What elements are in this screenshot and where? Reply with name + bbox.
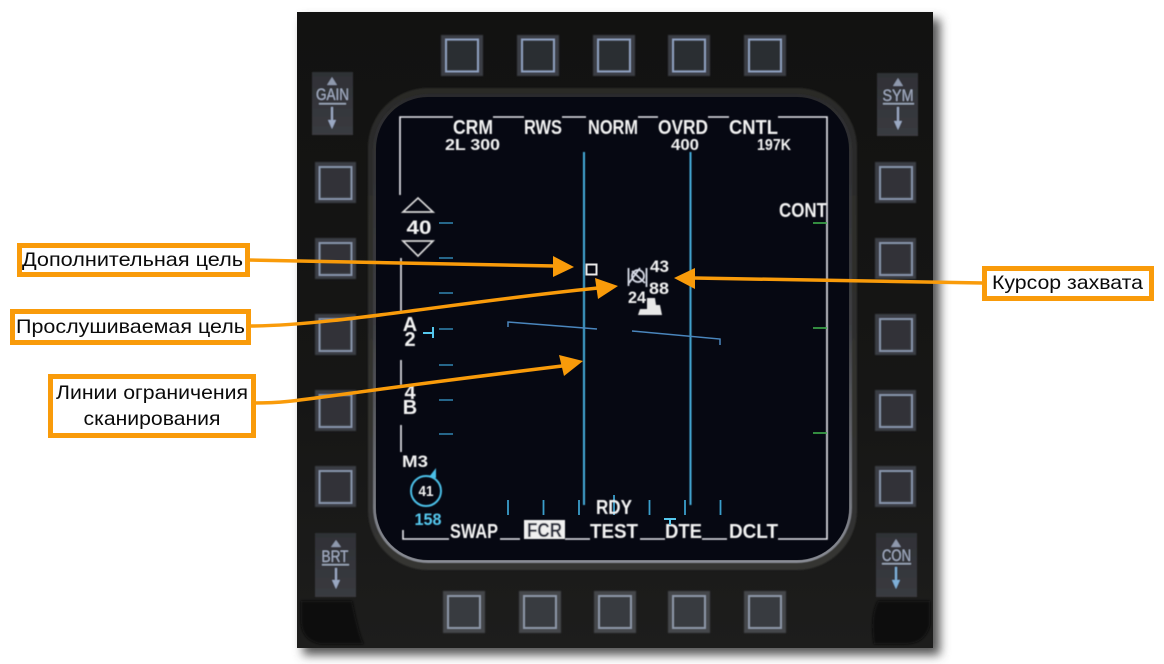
- rocker: SYM: SYM: [882, 86, 914, 105]
- target data: 88: [649, 279, 669, 298]
- left buttons: [318, 165, 353, 504]
- elevation ticks: [439, 223, 453, 434]
- bottom buttons: [446, 594, 783, 630]
- sub labels: [445, 137, 791, 154]
- top labels: [453, 117, 778, 139]
- CONT label: CONT: [779, 200, 827, 222]
- bottom labels: DTE: [665, 521, 702, 543]
- rocker: GAIN: [312, 72, 353, 135]
- range ticks: [813, 223, 827, 433]
- sub labels: 197K: [757, 137, 791, 154]
- bar scan and azimuth labels: A: [403, 314, 417, 336]
- screen bezel: [368, 88, 857, 570]
- sub labels: 400: [671, 137, 699, 154]
- bullseye: [411, 468, 442, 529]
- cyan scan cursors: [584, 152, 690, 505]
- range scale: 40: [406, 218, 432, 239]
- rocker: BRT: [315, 533, 356, 597]
- sub labels: 2L 300: [445, 137, 500, 154]
- acquisition cursor: [638, 298, 662, 315]
- radar altitude cue: [423, 327, 433, 338]
- callout: scan limit lines: сканирования: [84, 408, 220, 430]
- bar scan and azimuth labels: 2: [404, 329, 416, 351]
- bar scan and azimuth labels: 4: [404, 382, 416, 404]
- top buttons: [444, 38, 783, 73]
- azimuth ticks: [508, 495, 720, 515]
- target data: [628, 257, 669, 307]
- bottom labels: [450, 497, 778, 543]
- callout: interrogated target: Прослушиваемая цель: [16, 316, 245, 338]
- bottom corner recesses: [301, 601, 930, 644]
- callout: additional target: Дополнительная цель: [22, 249, 243, 271]
- bottom labels: DCLT: [729, 521, 778, 543]
- callout: scan limit lines: [50, 355, 583, 436]
- rocker: SYM: [877, 73, 918, 136]
- bar scan and azimuth labels: B: [403, 397, 417, 419]
- rocker: CON: [876, 533, 917, 597]
- callout: acquisition cursor: Курсор захвата: [992, 272, 1143, 294]
- callout: additional target: [20, 246, 574, 277]
- scan limit lines: [508, 322, 720, 345]
- bullseye: 158: [414, 510, 442, 529]
- target data: 43: [650, 257, 669, 276]
- right buttons: [878, 165, 913, 504]
- MFD screen: [376, 97, 849, 560]
- bottom labels: RDY: [596, 497, 633, 519]
- target data: 24: [628, 288, 647, 307]
- panel shadow: [303, 19, 940, 655]
- bullseye: 41: [418, 483, 434, 500]
- top labels: RWS: [524, 117, 562, 139]
- rocker: CON: CON: [882, 546, 911, 565]
- top labels: NORM: [588, 117, 638, 139]
- bottom labels: SWAP: [450, 521, 498, 543]
- bar scan and azimuth labels: [403, 314, 417, 419]
- additional target: [586, 264, 596, 274]
- mode label: M3: [402, 452, 428, 471]
- rocker: BRT: BRT: [322, 547, 348, 566]
- DTE marker: [664, 519, 676, 525]
- top labels: CRM: [453, 117, 493, 139]
- top labels: OVRD: [658, 117, 708, 139]
- callout: acquisition cursor: [674, 268, 1152, 298]
- rocker: GAIN: GAIN: [316, 85, 349, 104]
- top labels: CNTL: [729, 117, 778, 139]
- bottom labels: TEST: [590, 521, 638, 543]
- bottom labels: FCR: [527, 520, 562, 542]
- MFD device panel: [297, 12, 933, 648]
- callout: scan limit lines: Линии ограничения: [56, 382, 248, 404]
- interrogated target symbol: [628, 268, 646, 287]
- radar frame: [400, 117, 827, 539]
- range scale: [403, 198, 433, 256]
- callout: interrogated target: [12, 278, 618, 342]
